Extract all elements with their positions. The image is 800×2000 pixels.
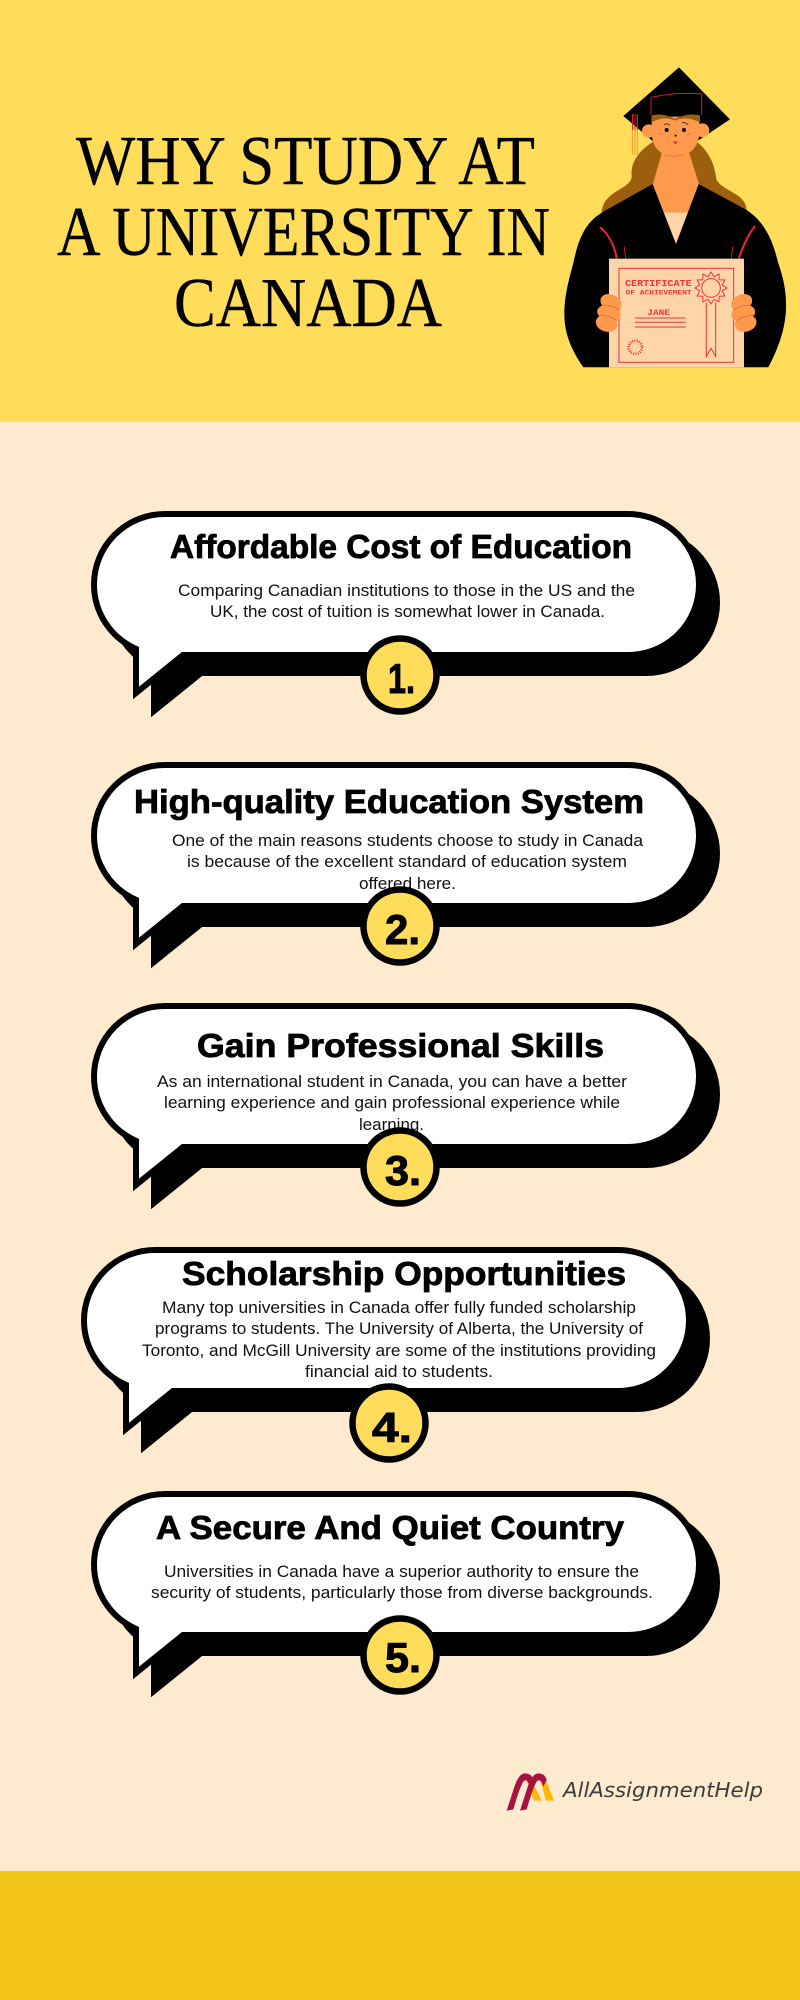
- icon: face: [642, 115, 709, 156]
- speech bubble 3: [94, 1006, 699, 1185]
- number badge 2: [364, 890, 436, 962]
- text block 4: programs to students. The University of Alberta, the University of: [155, 1319, 643, 1338]
- text block 1: [178, 581, 635, 621]
- text block 3: learning.: [359, 1115, 424, 1134]
- icon: neck: [653, 150, 699, 244]
- number badge 3: 3.: [385, 1147, 421, 1194]
- text block 5: Universities in Canada have a superior authority to ensure the: [164, 1562, 639, 1581]
- speech bubble 4: [84, 1250, 689, 1429]
- text block 1: Comparing Canadian institutions to those in the US and the: [178, 581, 635, 600]
- icon: shirt: [664, 213, 688, 243]
- header band: [0, 0, 800, 422]
- number badge 4: [352, 1386, 426, 1460]
- text block 2: One of the main reasons students choose to study in Canada: [172, 831, 644, 850]
- panel: reason 2: [94, 765, 717, 962]
- panel: reason 1: [94, 514, 717, 712]
- logo: AllAssignmentHelp: [507, 1773, 763, 1811]
- bubble shadow 1: [112, 532, 717, 711]
- speech bubble 5: [94, 1494, 699, 1673]
- icon: cap outline: [651, 93, 702, 115]
- text block 2: is because of the excellent standard of education system: [187, 852, 627, 871]
- bubble shadow 4: [102, 1268, 707, 1447]
- text block 3: [157, 1072, 627, 1134]
- panel: reason 5: [94, 1494, 717, 1692]
- text block 3: As an international student in Canada, you can have a better: [157, 1072, 627, 1091]
- number badge 5: [364, 1618, 436, 1692]
- certificate: CERTIFICATE: [625, 278, 692, 289]
- icon: hair: [602, 142, 747, 213]
- logo wordmark: AllAssignmentHelp: [561, 1778, 763, 1802]
- text block 5: security of students, particularly those from diverse backgrounds.: [151, 1583, 653, 1602]
- bubble shadow 3: [112, 1024, 717, 1203]
- bubble shadow 2: [112, 783, 717, 962]
- icon: sleeve details: [624, 247, 733, 258]
- certificate: [609, 259, 744, 367]
- icon: tassel: [633, 114, 637, 155]
- icon: logo mark: [507, 1773, 554, 1811]
- text block 1: UK, the cost of tuition is somewhat lower in Canada.: [210, 602, 605, 621]
- speech bubble 2: [94, 765, 699, 944]
- heading 2: High-quality Education System: [134, 783, 644, 820]
- title: WHY STUDY AT: [76, 123, 535, 200]
- heading 4: Scholarship Opportunities: [182, 1255, 626, 1292]
- text block 4: Many top universities in Canada offer fully funded scholarship: [162, 1298, 636, 1317]
- text block 4: Toronto, and McGill University are some of the institutions providing: [142, 1341, 656, 1360]
- number badge 1: [364, 638, 436, 712]
- panel: reason 4: [84, 1250, 707, 1460]
- icon: sleeve lines: [600, 226, 755, 258]
- certificate: JANE: [647, 308, 670, 318]
- heading 3: Gain Professional Skills: [197, 1027, 604, 1064]
- certificate: OF ACHIEVEMENT: [626, 288, 692, 296]
- icon: gown: [564, 184, 786, 367]
- text block 2: offered here.: [359, 874, 456, 893]
- text block 5: [151, 1562, 653, 1602]
- bubble shadow 5: [112, 1512, 717, 1691]
- heading 5: A Secure And Quiet Country: [156, 1509, 625, 1546]
- illustration: graduate holding certificate: [564, 67, 786, 367]
- number badge 5: 5.: [385, 1634, 421, 1681]
- text block 4: [142, 1298, 656, 1381]
- title: A UNIVERSITY IN: [57, 194, 550, 271]
- heading 1: Affordable Cost of Education: [170, 528, 632, 565]
- text block 3: learning experience and gain professional experience while: [164, 1093, 620, 1112]
- number badge 2: 2.: [385, 906, 420, 953]
- footer band: [0, 1871, 800, 2000]
- panel: reason 3: [94, 1006, 717, 1204]
- title: [57, 123, 550, 342]
- icon: mortarboard cap: [623, 67, 730, 142]
- icon: right hand: [728, 291, 758, 334]
- title: CANADA: [174, 265, 442, 342]
- number badge 1: 1.: [388, 655, 415, 702]
- text block 2: [172, 831, 644, 893]
- speech bubble 1: [94, 514, 699, 693]
- number badge 3: [364, 1130, 436, 1204]
- icon: left hand: [594, 291, 624, 334]
- text block 4: financial aid to students.: [305, 1362, 493, 1381]
- number badge 4: 4.: [372, 1404, 412, 1451]
